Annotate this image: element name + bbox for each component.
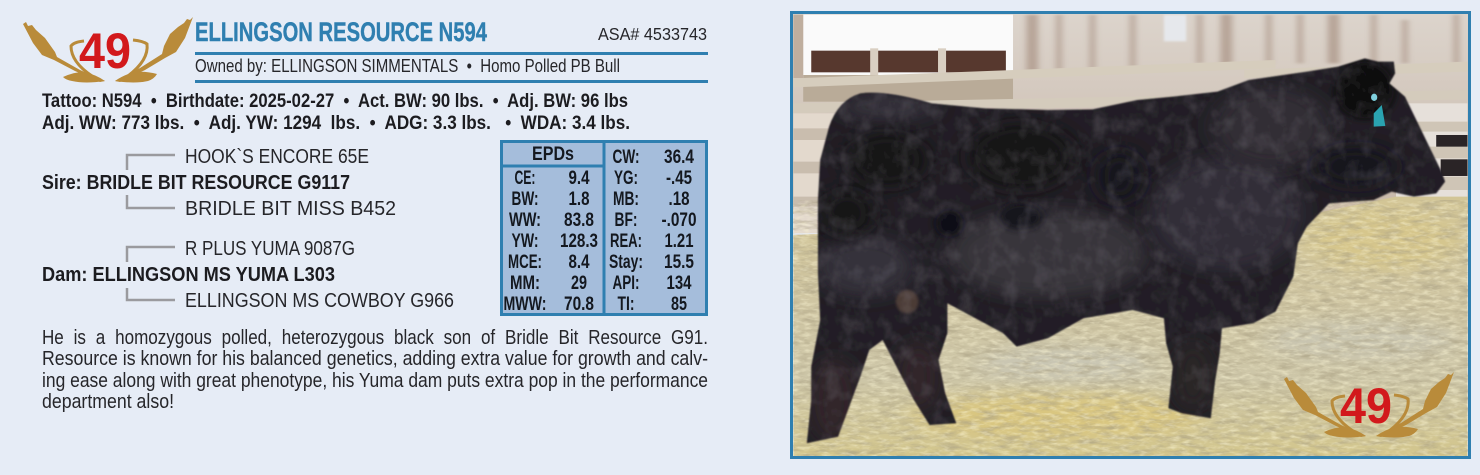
EPD table: YG: <box>614 168 638 189</box>
EPD table: YW: <box>512 231 538 252</box>
pedigree: dam: ELLINGSON MS COWBOY G966 <box>185 289 454 312</box>
EPD table: MCE: <box>508 252 542 273</box>
ear tag <box>1374 105 1385 127</box>
EPD table: API: <box>612 273 640 294</box>
EPD table: BF: <box>614 210 638 231</box>
EPD table: MM: <box>510 273 540 294</box>
photo frame <box>792 12 1470 458</box>
logo: 49 wheat crest: 49 <box>79 23 131 79</box>
EPD table: 1.21 <box>664 231 694 252</box>
EPD table: 85 <box>671 294 687 315</box>
pedigree: dam <box>42 237 454 312</box>
EPD table: 83.8 <box>564 210 594 231</box>
coat dark patches <box>847 133 927 187</box>
logo: 49 wheat crest <box>23 17 193 82</box>
description paragraph: ing ease along with great phenotype, his Yuma dam puts extra pop in the performance <box>42 370 708 392</box>
pedigree: sire: BRIDLE BIT MISS B452 <box>185 197 396 220</box>
pedigree: sire: HOOK`S ENCORE 65E <box>185 145 369 168</box>
straw shadow texture <box>793 200 1469 456</box>
owner rule <box>195 80 708 83</box>
straw patches <box>909 393 1204 440</box>
EPD table: 9.4 <box>568 168 590 189</box>
EPD table: 29 <box>571 273 587 294</box>
EPD table: CE: <box>514 168 536 189</box>
ear button <box>1371 94 1377 101</box>
white barn <box>803 15 1013 78</box>
coat highlights <box>950 210 1146 297</box>
logo: 49 wheat crest on photo <box>1284 372 1454 438</box>
EPD table: 128.3 <box>560 231 598 252</box>
pedigree: dam: R PLUS YUMA 9087G <box>185 237 355 260</box>
EPD table: -.070 <box>662 210 696 231</box>
EPD table: Stay: <box>609 252 643 273</box>
description paragraph: Resource is known for his balanced genetics, adding extra value for growth and calv- <box>42 348 708 370</box>
description paragraph: department also! <box>42 391 174 413</box>
bull body <box>806 58 1446 444</box>
pedigree: dam: Dam: ELLINGSON MS YUMA L303 <box>42 263 335 286</box>
EPD table: BW: <box>512 189 538 210</box>
bare trees <box>1032 15 1456 73</box>
EPD table: 15.5 <box>664 252 694 273</box>
sky gap <box>1164 15 1186 41</box>
EPD table: 8.4 <box>568 252 590 273</box>
pedigree: sire <box>42 145 396 220</box>
performance stats: Tattoo: N594 • Birthdate: 2025-02-27 • Act. BW: 90 lbs. • Adj. BW: 96 lbs <box>42 91 628 112</box>
EPD table <box>501 141 706 315</box>
fence rails <box>793 60 1276 87</box>
logo: 49 wheat crest on photo: 49 <box>1340 378 1392 434</box>
description paragraph: He is a homozygous polled, heterozygous black son of Bridle Bit Resource G91. <box>42 327 708 349</box>
barn lower shade <box>803 75 1013 102</box>
registration number: ASA# 4533743 <box>598 24 707 44</box>
leg tones <box>810 360 856 439</box>
EPD table: .18 <box>668 189 690 210</box>
EPD table: TI: <box>618 294 634 315</box>
EPD table: EPDs <box>532 144 574 165</box>
EPD table: MWW: <box>504 294 546 315</box>
owner line: Owned by: ELLINGSON SIMMENTALS • Homo Polled PB Bull <box>195 55 620 76</box>
barn left post <box>793 15 803 78</box>
pedigree: sire: Sire: BRIDLE BIT RESOURCE G9117 <box>42 171 350 194</box>
EPD table: -.45 <box>666 168 692 189</box>
EPD table: REA: <box>610 231 642 252</box>
EPD table: CW: <box>612 147 640 168</box>
title rule <box>195 52 708 55</box>
title: ELLINGSON RESOURCE N594 <box>195 17 487 47</box>
trees and sky <box>793 14 1469 214</box>
barn windows <box>811 51 1006 72</box>
coat texture <box>807 57 1450 447</box>
straw ground <box>793 197 1467 457</box>
EPD table: 1.8 <box>568 189 590 210</box>
straw light texture <box>793 200 1469 456</box>
description paragraph <box>42 327 708 413</box>
EPD table: MB: <box>613 189 639 210</box>
panel: bull photograph <box>780 0 1480 475</box>
EPD table: 36.4 <box>664 147 694 168</box>
performance stats <box>42 91 630 134</box>
EPD table: 70.8 <box>564 294 594 315</box>
performance stats: Adj. WW: 773 lbs. • Adj. YW: 1294 lbs. • ADG: 3.3 lbs. • WDA: 3.4 lbs. <box>42 113 630 134</box>
EPD table: 134 <box>666 273 692 294</box>
EPD table: WW: <box>509 210 541 231</box>
